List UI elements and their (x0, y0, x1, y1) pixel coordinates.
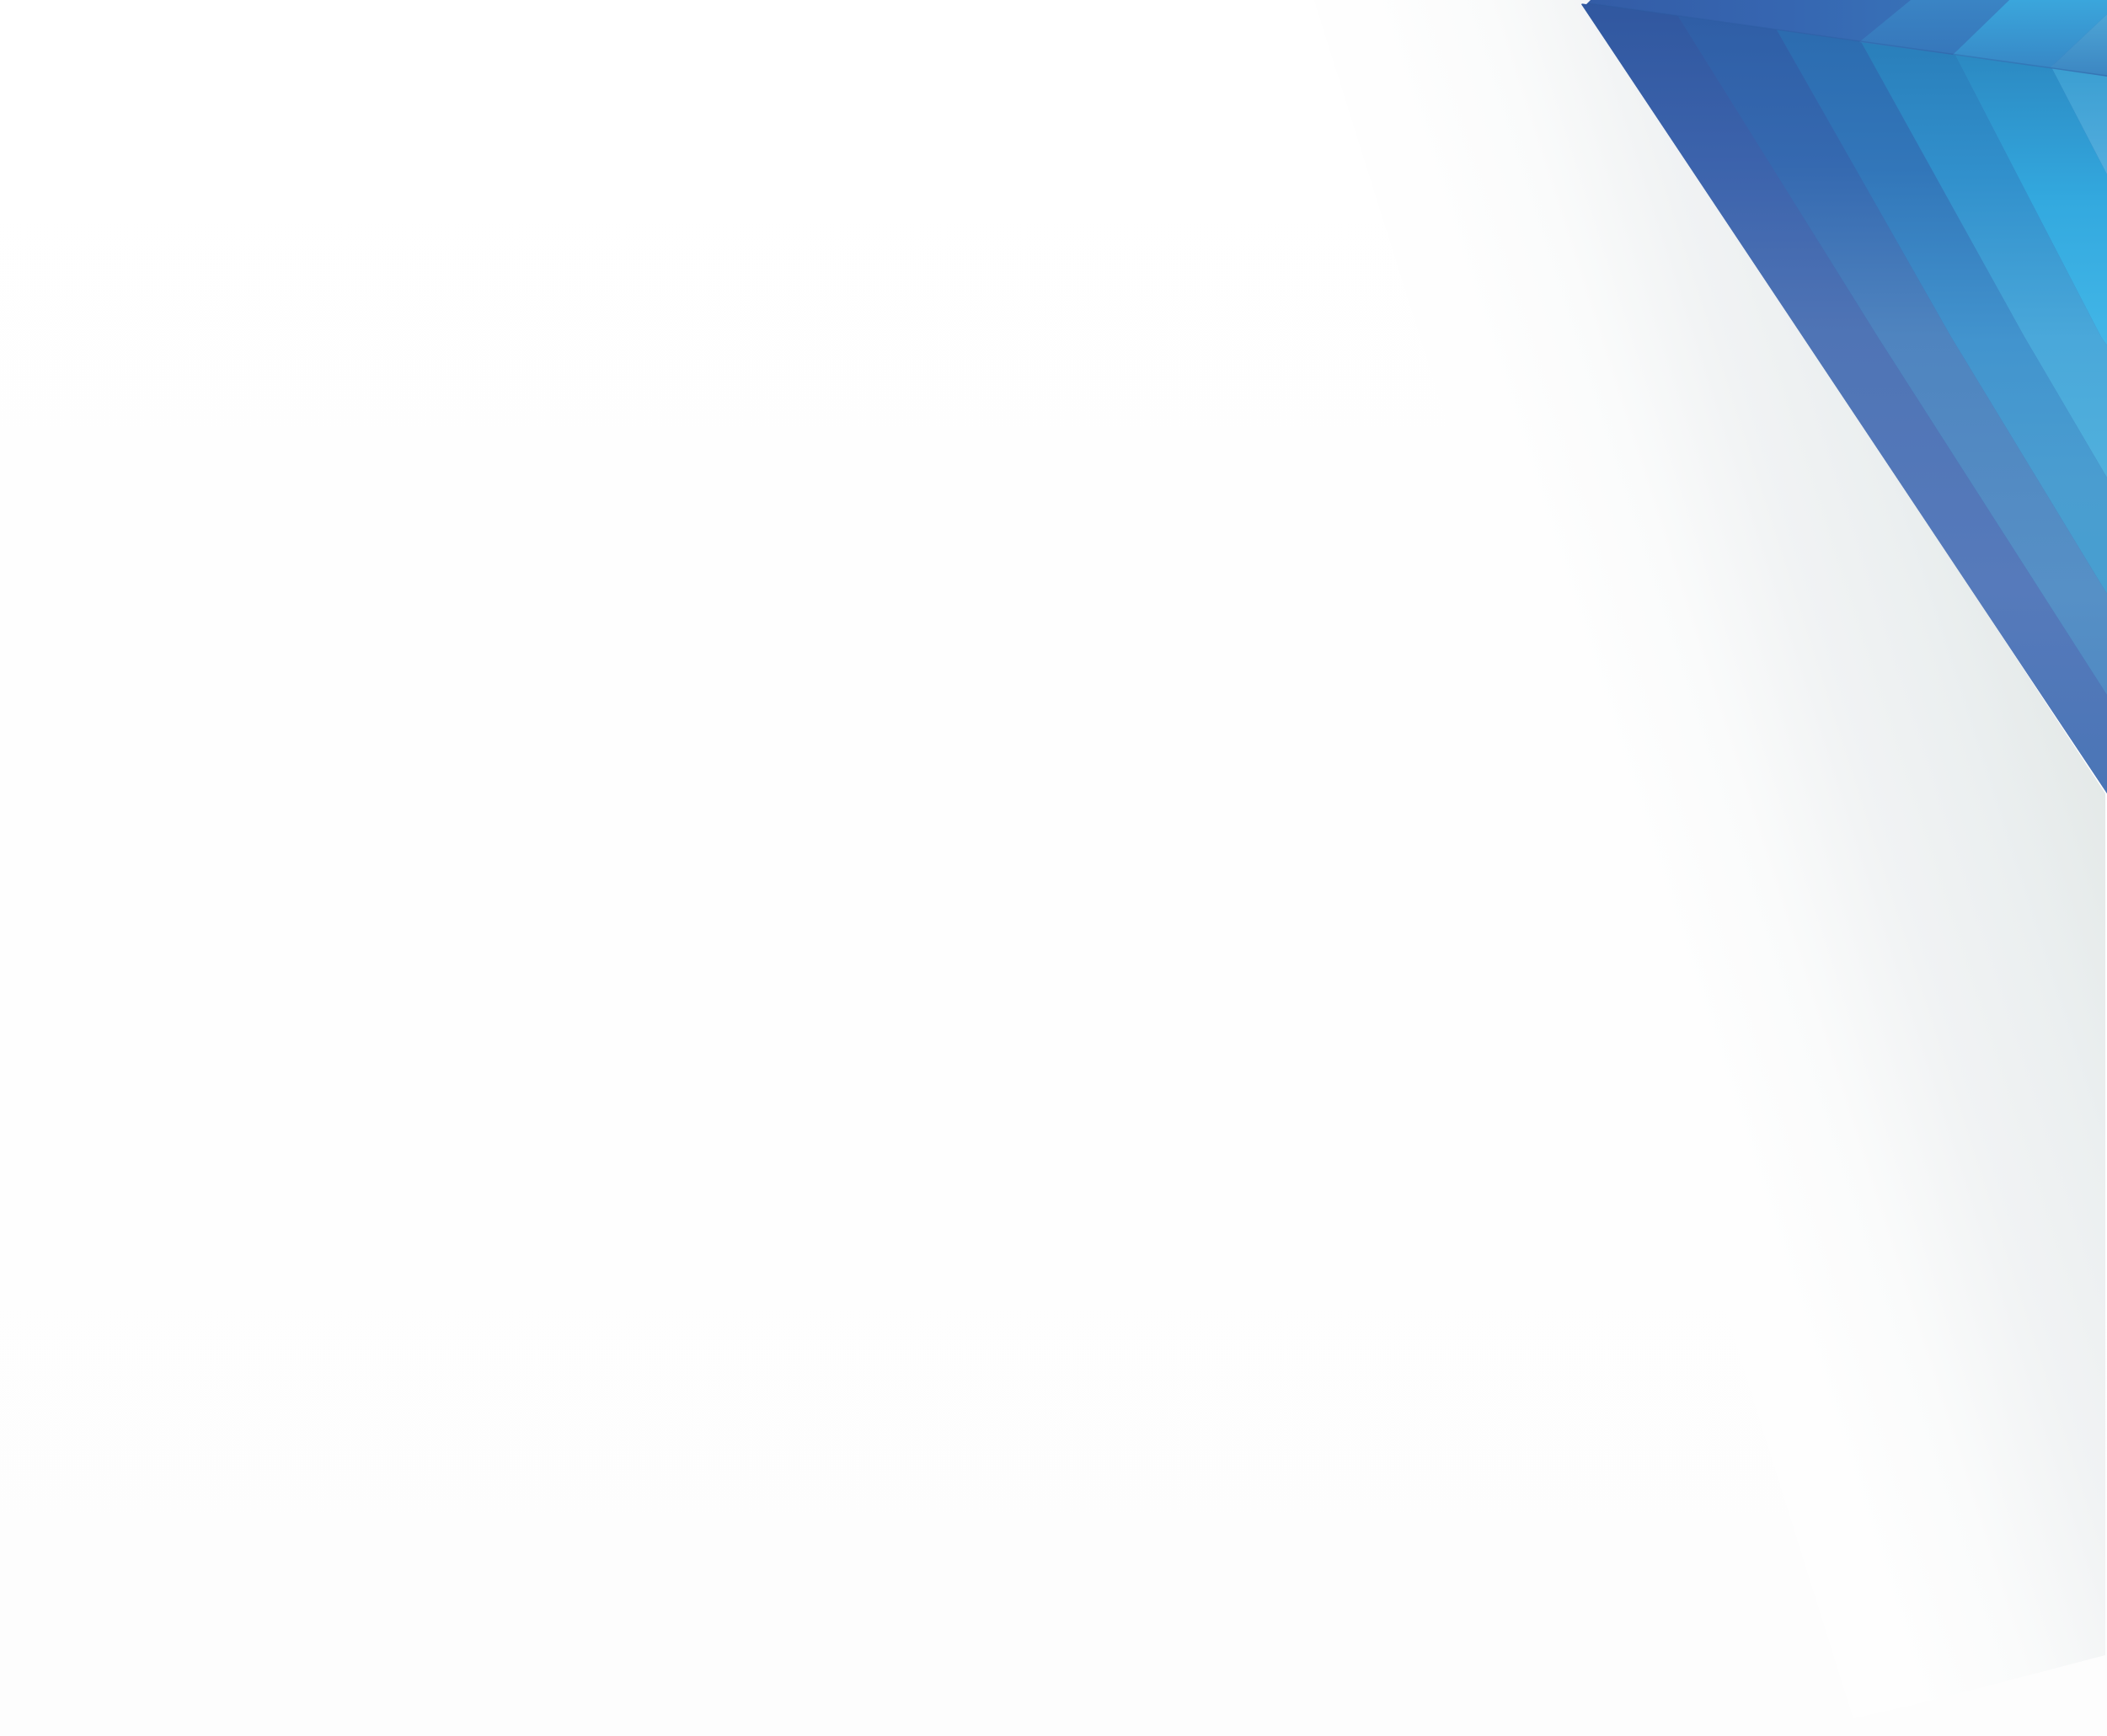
small white notch at the fold corner (1580, 0, 1591, 4)
soft grey shadow beneath the blue corner (1314, 0, 2105, 1718)
top folded band with lighter facets (1584, 0, 2107, 77)
diagonal blue stripes (1581, 0, 2107, 793)
